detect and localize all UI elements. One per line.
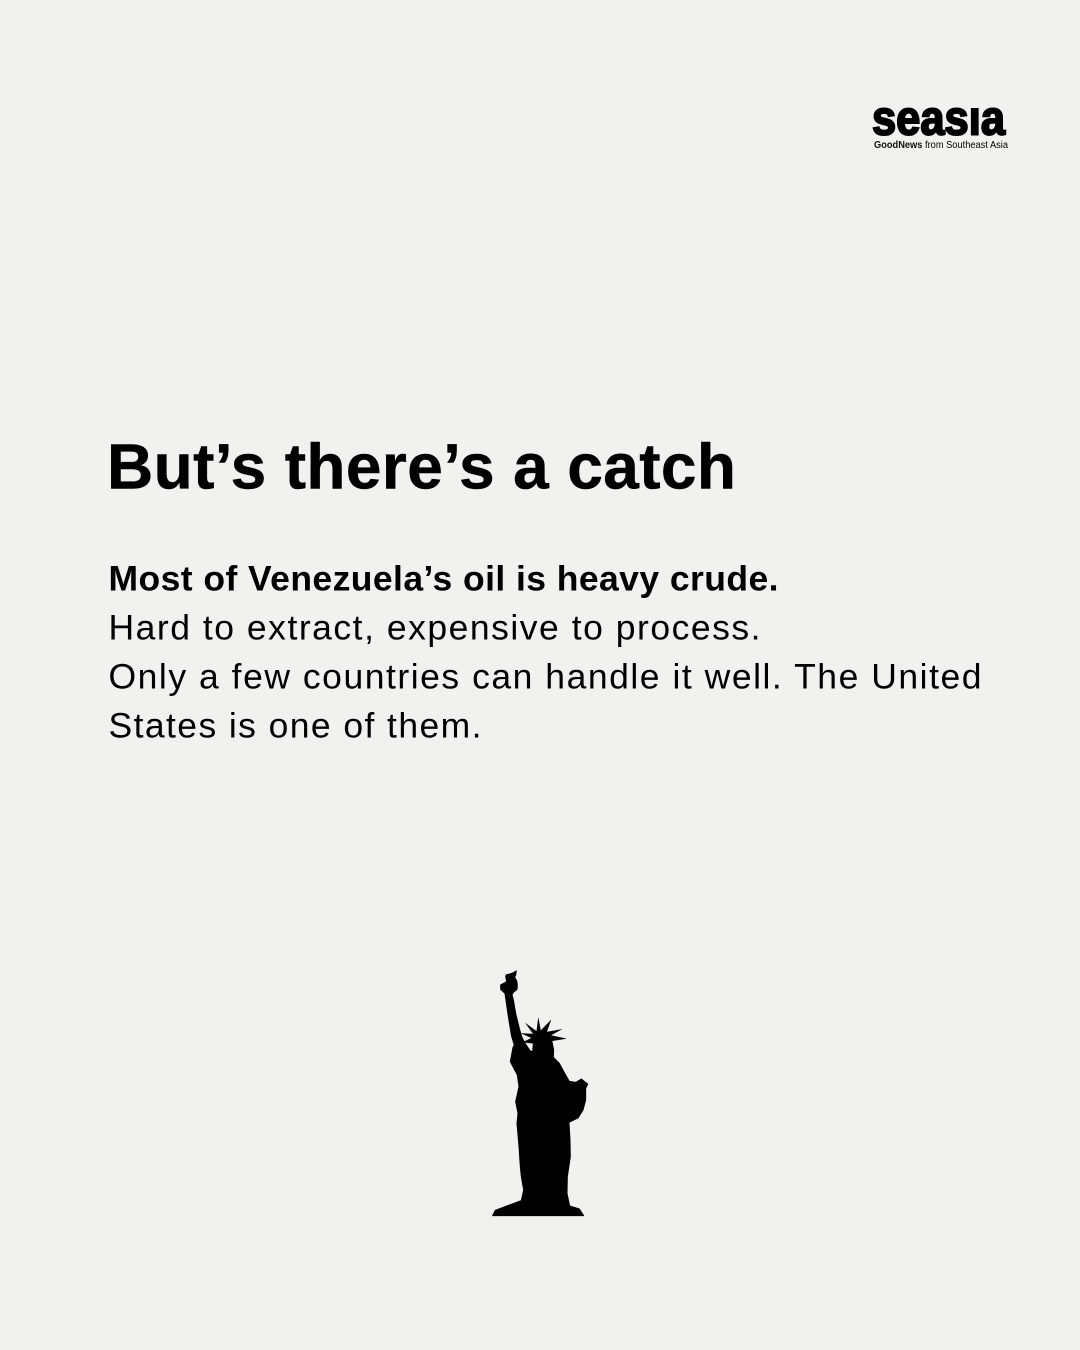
title: But’s there’s a catch (107, 430, 736, 502)
body text: Most of Venezuela’s oil is heavy crude. (108, 558, 778, 598)
logo: seasia: seasia (872, 92, 1005, 146)
body text: States is one of them. (108, 706, 482, 746)
body text: Hard to extract, expensive to process. (108, 608, 760, 648)
logo: seasia: GoodNews from Southeast Asia (874, 140, 1008, 151)
body text: Only a few countries can handle it well. The United (108, 656, 981, 696)
body text (108, 558, 981, 746)
icon: Statue of Liberty silhouette (493, 971, 588, 1216)
logo: seasia (872, 108, 1008, 148)
